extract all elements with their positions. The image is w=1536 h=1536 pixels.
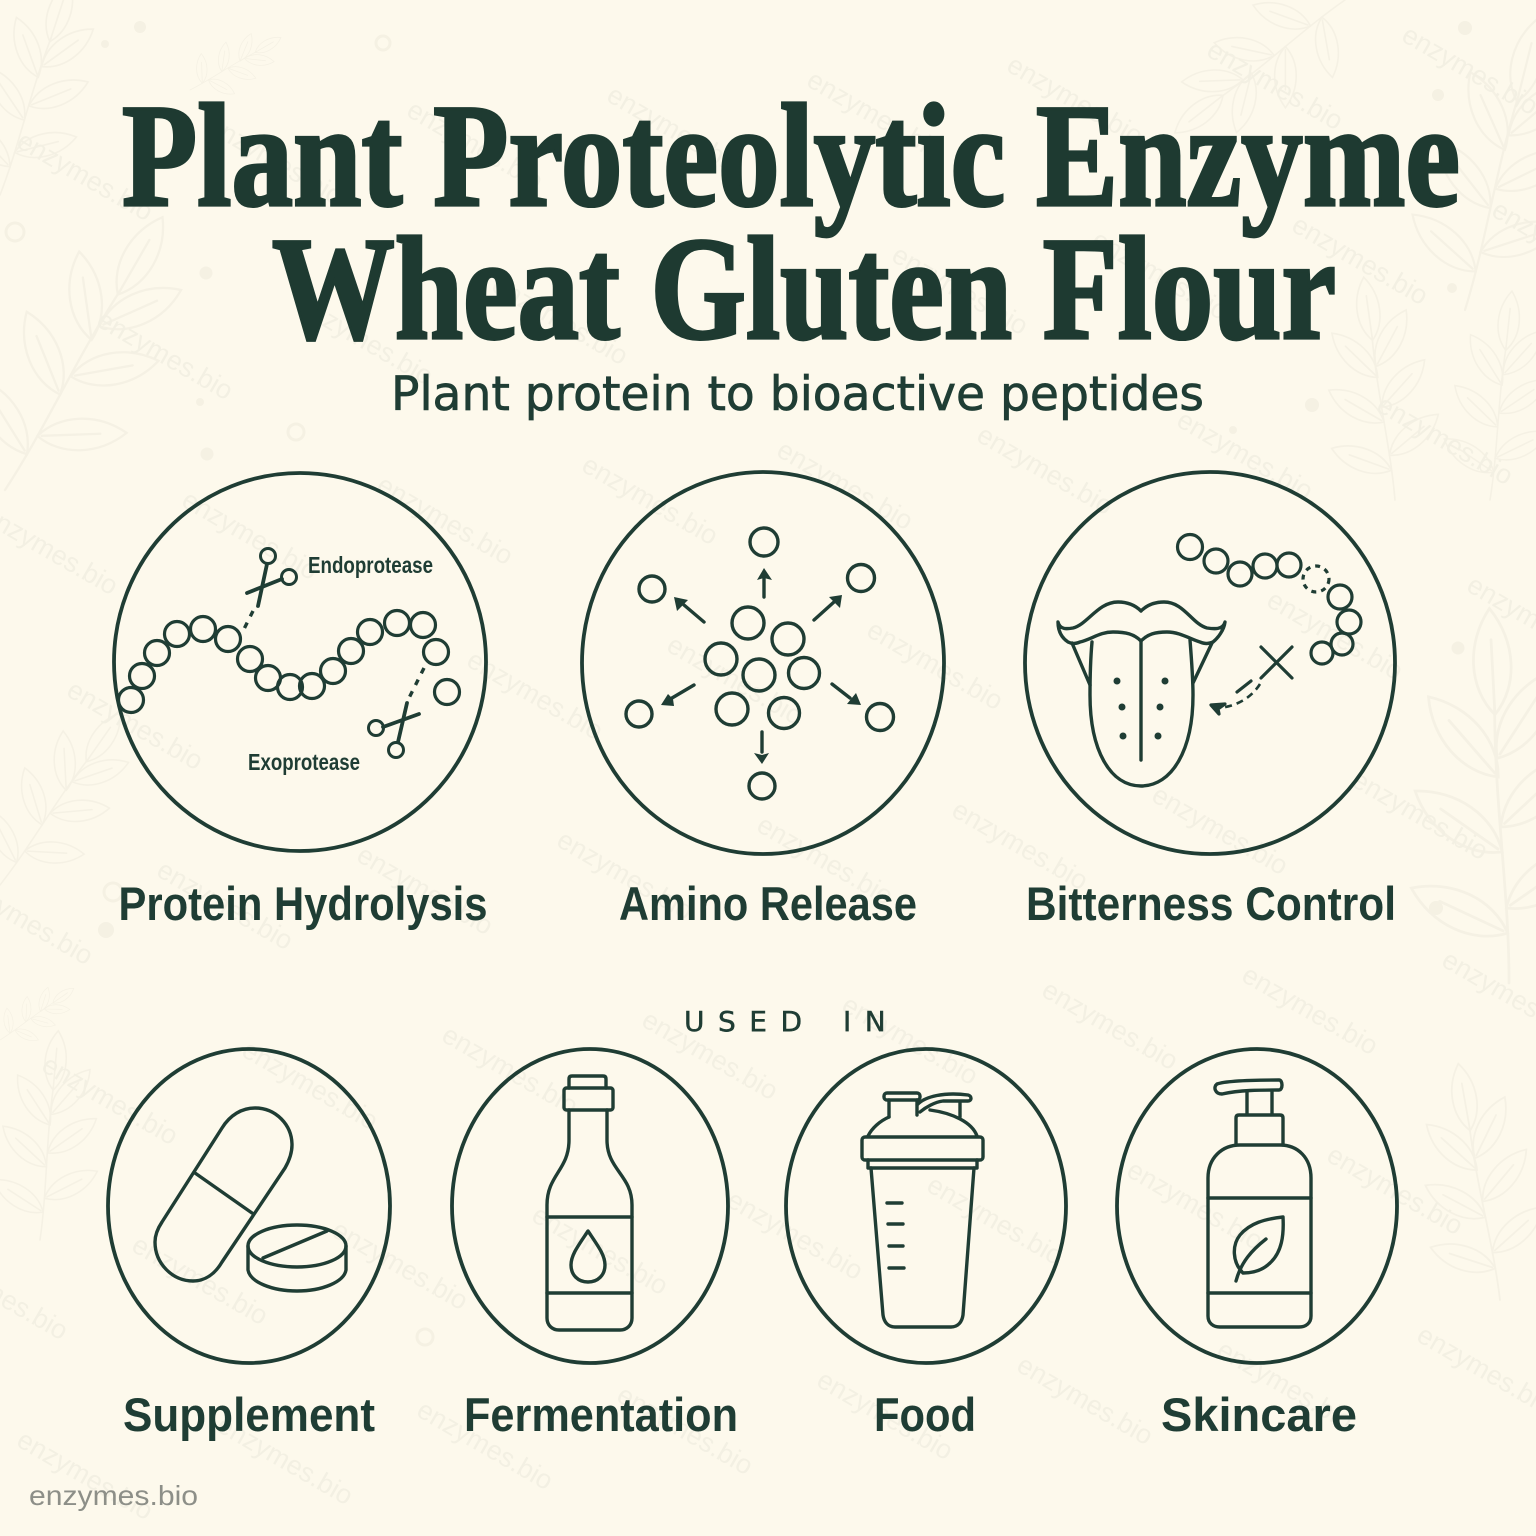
text: enzymes.bio (862, 614, 1008, 716)
text: enzymes.bio (802, 64, 948, 166)
text: enzymes.bio (212, 1409, 358, 1511)
label: bitterness control: Bitterness Control (1026, 877, 1396, 930)
label: endoprotease: Endoprotease (308, 552, 433, 578)
text: enzymes.bio (462, 644, 608, 746)
panel: fermentation (452, 1049, 728, 1363)
footer: brand: enzymes.bio (29, 1480, 198, 1511)
text: enzymes.bio (352, 839, 498, 941)
text: enzymes.bio (922, 1169, 1068, 1271)
icon: bottle (547, 1076, 632, 1330)
icon: blocked arrow (1211, 647, 1292, 714)
label: amino release: Amino Release (619, 877, 917, 930)
title: Wheat Gluten Flour (272, 207, 1336, 370)
text: enzymes.bio (812, 1364, 958, 1466)
label: fermentation: Fermentation (464, 1388, 738, 1441)
title (122, 74, 1460, 370)
text: enzymes.bio (837, 989, 983, 1091)
label: protein hydrolysis: Protein Hydrolysis (118, 877, 488, 930)
text: enzymes.bio (1347, 764, 1493, 866)
icon: shaker bottle (862, 1093, 983, 1327)
text: enzymes.bio (612, 1379, 758, 1481)
text: enzymes.bio (887, 239, 1033, 341)
text: enzymes.bio (12, 1424, 158, 1526)
text: enzymes.bio (1202, 34, 1348, 136)
text: enzymes.bio (1372, 389, 1518, 491)
text: enzymes.bio (402, 94, 548, 196)
text: enzymes.bio (327, 1214, 473, 1316)
text: enzymes.bio (437, 1019, 583, 1121)
text: enzymes.bio (1212, 1334, 1358, 1436)
text: enzymes.bio (602, 79, 748, 181)
text: enzymes.bio (412, 1394, 558, 1496)
text: enzymes.bio (372, 469, 518, 571)
text: enzymes.bio (1262, 584, 1408, 686)
text: enzymes.bio (527, 1199, 673, 1301)
text: enzymes.bio (127, 1229, 273, 1331)
text: enzymes.bio (37, 1049, 183, 1151)
panel: skincare (1117, 1049, 1397, 1363)
icon: amino acid burst (626, 528, 894, 799)
label: supplement: Supplement (123, 1388, 375, 1441)
icon: peptide chain (118, 610, 460, 712)
icon: tongue (1058, 602, 1225, 786)
heading: used in: USED (684, 1005, 816, 1038)
text: enzymes.bio (237, 1034, 383, 1136)
text: enzymes.bio (1087, 224, 1233, 326)
heading: used in: IN (843, 1005, 899, 1038)
panel: amino release (582, 472, 944, 854)
icon: capsule and tablet (155, 1108, 346, 1291)
icon: scissors top (244, 548, 296, 629)
text: enzymes.bio (772, 434, 918, 536)
text: enzymes.bio (92, 304, 238, 406)
text: enzymes.bio (947, 794, 1093, 896)
text: enzymes.bio (1037, 974, 1183, 1076)
text: enzymes.bio (202, 109, 348, 211)
text: enzymes.bio (152, 854, 298, 956)
text: enzymes.bio (1122, 1154, 1268, 1256)
label: food: Food (874, 1388, 976, 1441)
text: enzymes.bio (1287, 209, 1433, 311)
text: enzymes.bio (1322, 1139, 1468, 1241)
text: enzymes.bio (12, 125, 158, 227)
panel: bitterness control (1025, 472, 1395, 854)
icon: bitter peptide chain (1178, 534, 1361, 664)
panel: food (786, 1049, 1066, 1363)
text: enzymes.bio (752, 809, 898, 911)
text: enzymes.bio (722, 1184, 868, 1286)
text: enzymes.bio (1012, 1349, 1158, 1451)
text: enzymes.bio (62, 674, 208, 776)
text: enzymes.bio (637, 1004, 783, 1106)
subtitle: Plant protein to bioactive peptides (391, 367, 1204, 422)
text: enzymes.bio (662, 629, 808, 731)
panel: protein hydrolysis (114, 473, 486, 851)
panel: supplement (108, 1049, 390, 1363)
text: enzymes.bio (1147, 779, 1293, 881)
text: enzymes.bio (1002, 49, 1148, 151)
text: enzymes.bio (1237, 959, 1383, 1061)
label: exoprotease: Exoprotease (248, 749, 360, 775)
icon: scissors bottom (368, 668, 424, 758)
text: enzymes.bio (577, 449, 723, 551)
text: enzymes.bio (177, 484, 323, 586)
label: skincare: Skincare (1161, 1388, 1357, 1441)
text: enzymes.bio (487, 269, 633, 371)
text: enzymes.bio (1172, 404, 1318, 506)
icon: pump bottle (1208, 1080, 1311, 1327)
text: enzymes.bio (292, 289, 438, 391)
text: enzymes.bio (552, 824, 698, 926)
text: enzymes.bio (972, 419, 1118, 521)
